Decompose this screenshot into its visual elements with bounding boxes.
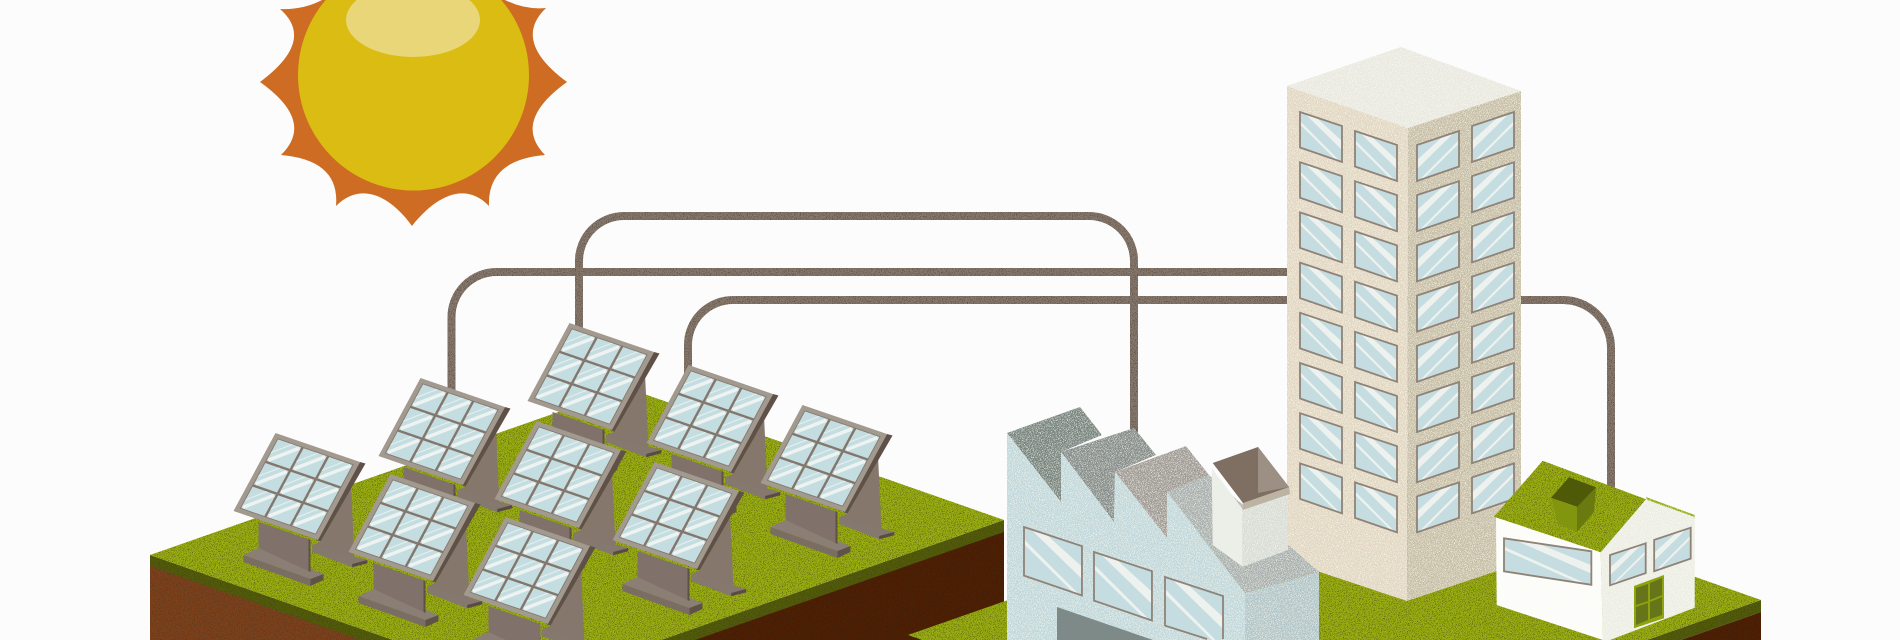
sun disc: [298, 0, 529, 191]
solar panel 9 cropped by frame: [464, 517, 596, 640]
sun rays: [260, 0, 567, 226]
factory door: [1057, 607, 1153, 640]
solar panel 2: [646, 365, 780, 518]
factory: [1007, 407, 1319, 640]
power cables: [452, 216, 1611, 495]
ground block: solar field: [150, 388, 1004, 640]
grass edge right: [661, 520, 1004, 640]
tower windows right face: [1417, 112, 1514, 532]
cable to factory: [579, 216, 1134, 440]
solar panel 6: [234, 433, 367, 586]
office tower: [1287, 47, 1521, 601]
solar panel 7: [612, 462, 746, 615]
soil left face: [150, 565, 364, 640]
solar panel 8: [348, 474, 482, 627]
solar panel 1: [528, 323, 661, 476]
factory windows: [1024, 527, 1223, 640]
house door: [1634, 575, 1664, 628]
tower windows left face: [1300, 112, 1397, 532]
factory chimney: [1212, 447, 1290, 567]
solar panel 3: [378, 378, 512, 531]
tower body: [1287, 47, 1521, 601]
solar panel 4: [760, 405, 894, 558]
solar panel 5: [494, 421, 628, 574]
cable to house: [688, 300, 1611, 495]
solar panel array: [234, 323, 894, 640]
house walls: [1496, 497, 1695, 640]
factory walls and roofs: [1007, 407, 1319, 640]
sun highlight: [346, 0, 480, 57]
icon: sun: [260, 0, 567, 226]
grass edge left: [150, 555, 393, 640]
house roof: [1494, 461, 1646, 552]
cable to tower: [452, 272, 1295, 395]
grass top: [908, 468, 1761, 640]
soil right face: [690, 530, 1004, 640]
house windows: [1504, 528, 1691, 585]
roof chimney: [1551, 477, 1596, 532]
soil right face: [1681, 612, 1761, 640]
grass top: [150, 388, 1004, 640]
grass edge: [1647, 600, 1761, 640]
house: [1494, 461, 1695, 640]
ground block: buildings: [908, 468, 1761, 640]
factory window cropped by frame: [1165, 577, 1223, 640]
